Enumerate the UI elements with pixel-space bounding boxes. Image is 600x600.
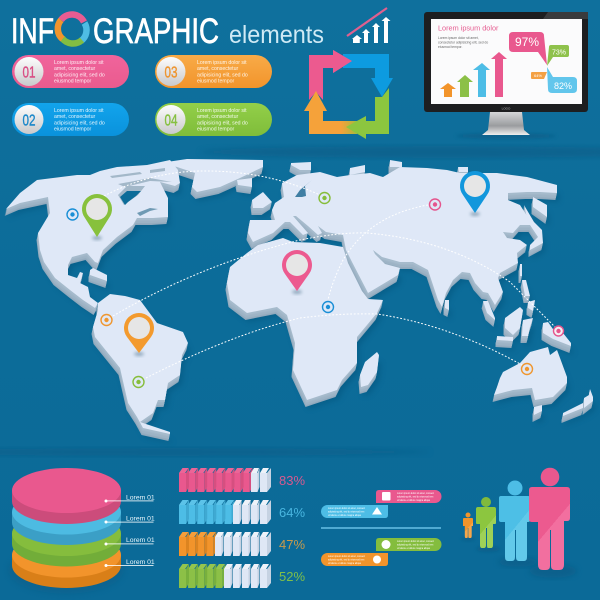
- panel: monitor: [424, 12, 588, 139]
- screen bubble 82%: 82%: [554, 81, 572, 91]
- panel: list item 02: adipisicing elit, sed do: [54, 120, 105, 126]
- location markers: [67, 192, 564, 388]
- person: pink: [529, 468, 570, 570]
- layer: blue: [12, 512, 121, 545]
- cylinder labels: Lorem 01: [126, 559, 155, 566]
- layer: green: [12, 534, 121, 566]
- bar chart: 47%: 47%: [279, 537, 305, 552]
- cylinder labels: Lorem 01: [126, 537, 155, 544]
- ribbon: pink: ut labore et dolore magna aliqua: [397, 499, 431, 502]
- panel: monitor: LOGO: [502, 106, 511, 110]
- cylinder labels: [104, 494, 155, 567]
- panel: list item 01: 01: [22, 64, 36, 82]
- screen text: [438, 36, 488, 49]
- panel: list item 03: amet, consectetur: [197, 66, 239, 72]
- ribbon: blue: adipisicing elit, sed do eiusmod tem: [328, 510, 364, 514]
- panel: list item 03: eiusmod tempor: [197, 78, 234, 84]
- screen bubble 97%: 97%: [515, 35, 539, 49]
- map pin: green: [82, 194, 112, 240]
- panel: list item 02: 02: [22, 112, 36, 130]
- panel: list item 03: [155, 55, 272, 88]
- title: [11, 12, 324, 51]
- panel: list item 02: eiusmod tempor: [54, 126, 91, 132]
- cylinder labels: Lorem 01: [126, 516, 155, 522]
- panel: list item 04: 04: [164, 112, 178, 130]
- bar chart: 52%: 52%: [279, 569, 305, 584]
- bar chart: 47%: [179, 532, 305, 556]
- screen text: consectetur adipisicing elit, sed do: [438, 40, 488, 44]
- ribbon: green: [376, 538, 442, 551]
- bar chart: 64%: [179, 500, 305, 524]
- screen bubble 64%: [531, 72, 547, 79]
- map pin: pink: [282, 250, 312, 294]
- map pin: blue: [460, 171, 490, 216]
- icon: growth chart: [347, 8, 390, 43]
- panel: list item 04: [155, 103, 272, 136]
- ribbon: blue: ut labore et dolore magna aliqua: [328, 514, 362, 517]
- world map: [4, 159, 595, 443]
- panel: list item 03: adipisicing elit, sed do: [197, 72, 248, 78]
- screen text: eiusmod tempor.: [438, 45, 463, 49]
- panel: list item 04: amet, consectetur: [197, 114, 239, 120]
- panel: list item 02: [12, 103, 129, 136]
- title: INF: [11, 12, 54, 51]
- panel: list item 04: eiusmod tempor: [197, 126, 234, 132]
- person: orange: [463, 512, 473, 538]
- screen bubble 82%: [547, 67, 577, 93]
- ribbon: orange: ut labore et dolore magna aliqua: [328, 562, 362, 565]
- bar chart: 64%: 64%: [279, 505, 305, 520]
- panel: list item 01: amet, consectetur: [54, 66, 96, 72]
- panel: list item 01: [12, 55, 129, 88]
- panel: list item 04: Lorem ipsum dolor sit: [197, 108, 247, 114]
- panel: list item 02: Lorem ipsum dolor sit: [54, 108, 104, 114]
- title: elements: [229, 21, 324, 49]
- map pin: orange: [124, 313, 154, 356]
- panel: list item 01: eiusmod tempor: [54, 78, 91, 84]
- panel: list item 03: Lorem ipsum dolor sit: [197, 60, 247, 66]
- screen bubble 97%: [509, 32, 547, 65]
- ribbon: pink: Lorem ipsum dolor sit amet, consect: [397, 492, 434, 495]
- panel: list item 02: amet, consectetur: [54, 114, 96, 120]
- panel: list item 01: Lorem ipsum dolor sit: [54, 60, 104, 66]
- ribbon: orange: [321, 553, 388, 566]
- ribbon: pink: [376, 490, 442, 503]
- bar chart: 83%: [179, 468, 305, 492]
- divider line: [321, 527, 441, 529]
- layer: orange: [12, 555, 121, 588]
- screen bar arrows: [440, 52, 507, 97]
- ribbon: green: Lorem ipsum dolor sit amet, consect: [397, 540, 434, 543]
- ribbon: pink: adipisicing elit, sed do eiusmod tem: [397, 496, 433, 498]
- ribbon: blue: Lorem ipsum dolor sit amet, consect: [328, 507, 365, 510]
- screen text: Lorem ipsum dolor sit amet,: [438, 36, 479, 40]
- stacked cylinder chart: [8, 468, 155, 594]
- icon: circular arrows ring: [58, 14, 87, 44]
- panel: list item 04: adipisicing elit, sed do: [197, 120, 248, 126]
- panel: list item 03: 03: [164, 64, 178, 82]
- screen heading: Lorem ipsum dolor: [438, 24, 499, 32]
- person: blue: [499, 480, 530, 561]
- ribbon: orange: adipisicing elit, sed do eiusmod tem: [328, 558, 364, 562]
- icon: square cycle arrows: [304, 50, 393, 139]
- monitor stand: [456, 112, 556, 139]
- person: green: [476, 497, 496, 548]
- cylinder labels: Lorem 01: [126, 494, 155, 502]
- ribbon: blue: [321, 505, 388, 518]
- dotted route lines: [104, 171, 556, 378]
- screen bubble 73%: [547, 45, 569, 66]
- title: GRAPHIC: [93, 12, 219, 51]
- bar chart: 52%: [179, 564, 305, 588]
- ribbon: green: ut labore et dolore magna aliqua: [397, 547, 431, 550]
- people chart: [461, 468, 577, 578]
- layer: pink: [12, 490, 121, 524]
- panel: list item 01: adipisicing elit, sed do: [54, 72, 105, 78]
- ribbon: orange: Lorem ipsum dolor sit amet, consect: [328, 555, 365, 558]
- screen bubble 73%: 73%: [552, 50, 566, 56]
- ribbon: green: adipisicing elit, sed do eiusmod tem: [397, 544, 433, 546]
- screen bubble 64%: 64%: [534, 73, 542, 78]
- bar chart: 83%: 83%: [279, 473, 305, 488]
